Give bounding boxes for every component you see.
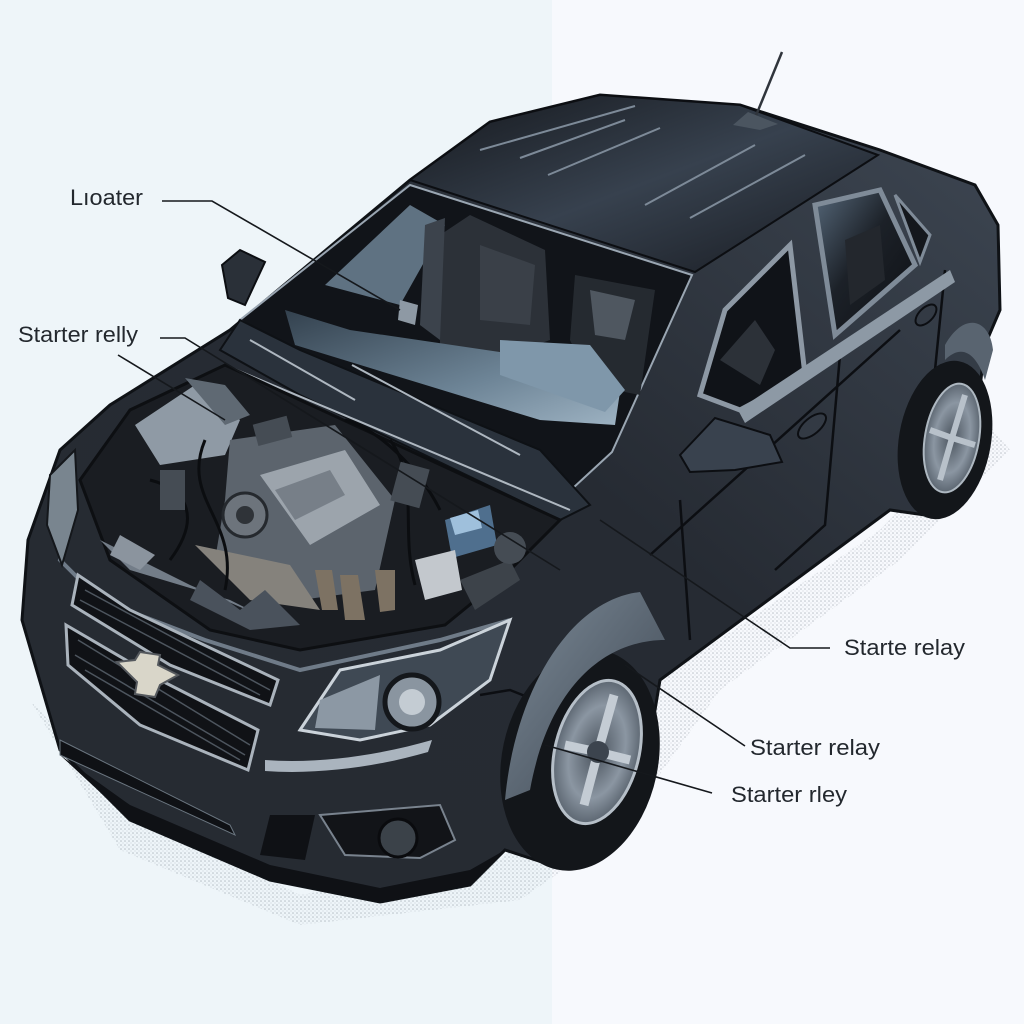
door handles xyxy=(794,301,940,443)
label: starte relay: Starte relay xyxy=(844,635,965,660)
seat rear xyxy=(420,218,445,340)
side mirror xyxy=(680,418,782,472)
bumper chrome xyxy=(265,740,432,772)
leader lines xyxy=(118,201,830,793)
front wheel xyxy=(480,634,680,886)
door lines xyxy=(480,270,945,708)
left window glass xyxy=(325,205,445,305)
grille mesh xyxy=(75,590,270,760)
rear wheel arch xyxy=(945,323,993,380)
console xyxy=(570,275,655,395)
label: starter rley: Starter rley xyxy=(731,782,847,807)
side trim xyxy=(738,270,955,423)
wiper cowl xyxy=(225,340,570,510)
rear wheel xyxy=(886,353,1004,527)
roof xyxy=(410,95,878,272)
exhaust manifold xyxy=(195,545,320,610)
battery xyxy=(445,505,497,558)
label: starter relay left: Starter relly xyxy=(18,322,138,347)
badge xyxy=(117,652,178,697)
headlight left xyxy=(47,450,78,565)
headlight lens xyxy=(315,675,439,730)
headlight right xyxy=(300,620,510,740)
hood underside xyxy=(285,310,620,425)
hood opening edge xyxy=(60,500,510,670)
engine bay xyxy=(80,365,560,650)
hood lid xyxy=(220,320,590,520)
coolant reservoir xyxy=(135,385,240,465)
label: locater: Lıoater xyxy=(70,185,143,210)
antenna xyxy=(733,52,782,130)
side windows xyxy=(700,190,930,410)
seat front xyxy=(440,215,550,358)
windshield interior xyxy=(240,185,692,500)
roof highlights xyxy=(480,106,805,218)
label: starter relay: Starter relay xyxy=(750,735,880,760)
left mirror xyxy=(222,250,265,305)
grille lower xyxy=(66,625,258,770)
ground shadow xyxy=(30,420,1010,925)
grille upper xyxy=(72,575,278,705)
engine block xyxy=(215,425,395,600)
radiator support xyxy=(100,540,270,620)
car body xyxy=(22,95,1000,902)
front wheel arch xyxy=(505,592,665,800)
lower bumper xyxy=(60,740,505,902)
